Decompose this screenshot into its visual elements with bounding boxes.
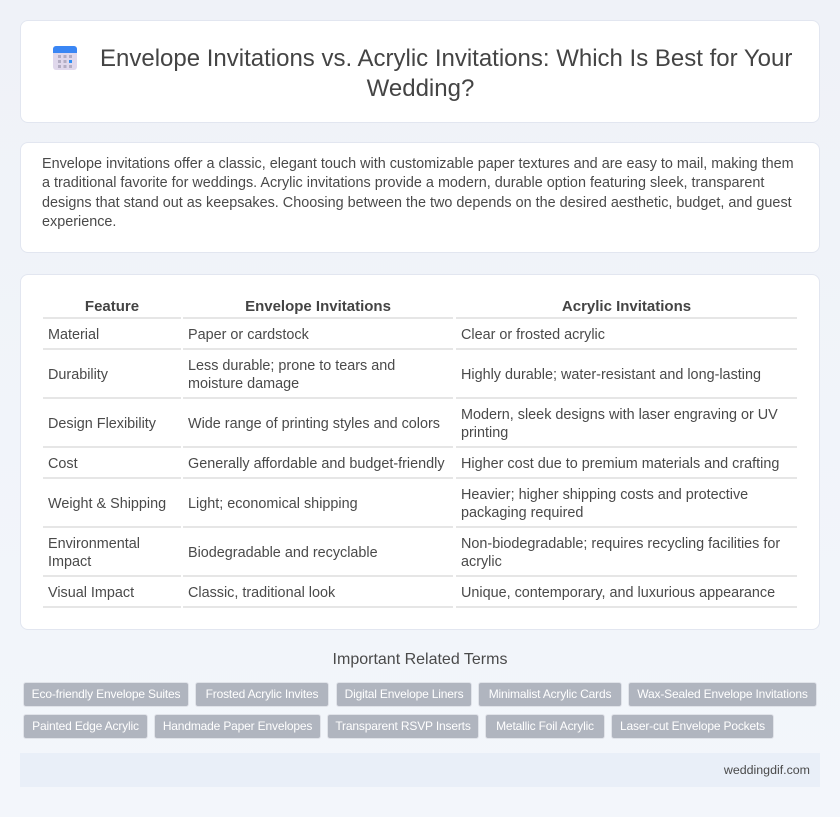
row: Visual Impact: Unique, contemporary, and luxurious appearance — [461, 585, 775, 601]
row: Visual Impact: Visual Impact — [48, 585, 134, 601]
tag — [327, 714, 479, 739]
table header: Feature: Feature — [85, 298, 139, 315]
tag: Digital Envelope Liners — [345, 687, 463, 701]
tag: Laser-cut Envelope Pockets — [620, 719, 765, 733]
row: Weight & Shipping — [48, 487, 748, 521]
row: Visual Impact: Classic, traditional look — [188, 585, 335, 601]
tag: Metallic Foil Acrylic — [496, 719, 594, 733]
description text: experience. — [42, 214, 116, 230]
footer source text: weddingdif.com — [724, 763, 810, 777]
row: Environmental Impact: Impact — [48, 554, 91, 570]
row: Environmental Impact: Non-biodegradable; requires recycling facilities for — [461, 536, 780, 552]
row: Environmental Impact: acrylic — [461, 554, 502, 570]
row: Environmental Impact: Biodegradable and recyclable — [188, 545, 378, 561]
heading: Important Related Terms: Important Related Terms — [333, 651, 507, 668]
tag: Eco-friendly Envelope Suites — [32, 687, 180, 701]
description text: a traditional favorite for weddings. Acrylic invitations provide a modern, durable option featuring sleek, transparent — [42, 175, 764, 191]
tag — [485, 714, 605, 739]
tag — [611, 714, 774, 739]
row: Environmental Impact: Environmental — [48, 536, 140, 552]
row: Environmental Impact — [48, 536, 780, 570]
row: Design Flexibility — [48, 407, 778, 441]
row: Material: Clear or frosted acrylic — [461, 327, 605, 343]
related terms tags — [23, 682, 817, 739]
tag: Wax-Sealed Envelope Invitations — [637, 687, 808, 701]
description text — [42, 156, 794, 230]
row: Weight & Shipping: Heavier; higher shipping costs and protective — [461, 487, 748, 503]
row: Cost: Cost — [48, 456, 78, 472]
tag — [154, 714, 321, 739]
footer bar — [20, 753, 820, 787]
row: Durability: moisture damage — [188, 376, 299, 392]
tag — [195, 682, 329, 707]
tag — [23, 714, 148, 739]
row: Cost — [48, 456, 779, 472]
row: Weight & Shipping: Weight & Shipping — [48, 496, 166, 512]
header panel — [20, 20, 820, 123]
row: Design Flexibility: Modern, sleek designs with laser engraving or UV — [461, 407, 778, 423]
row: Weight & Shipping: packaging required — [461, 505, 583, 521]
row: Cost: Generally affordable and budget-friendly — [188, 456, 445, 472]
tag: Handmade Paper Envelopes — [163, 719, 312, 733]
row: Durability: Less durable; prone to tears and — [188, 358, 395, 374]
table header: Envelope Invitations: Envelope Invitations — [245, 298, 391, 315]
row: Visual Impact — [48, 585, 775, 601]
row: Durability: Durability — [48, 367, 108, 383]
table header: Acrylic Invitations: Acrylic Invitations — [562, 298, 691, 315]
tag — [336, 682, 472, 707]
row: Material: Paper or cardstock — [188, 327, 309, 343]
tag: Transparent RSVP Inserts — [335, 719, 471, 733]
row: Material: Material — [48, 327, 99, 343]
row: Weight & Shipping: Light; economical shipping — [188, 496, 358, 512]
title: Envelope Invitations vs. Acrylic Invitations: Which Is Best for Your — [100, 45, 792, 72]
row: Cost: Higher cost due to premium materials and crafting — [461, 456, 779, 472]
tag: Minimalist Acrylic Cards — [489, 687, 611, 701]
row: Durability: Highly durable; water-resistant and long-lasting — [461, 367, 761, 383]
tag: Frosted Acrylic Invites — [206, 687, 318, 701]
title: Wedding? — [367, 75, 474, 102]
comparison table — [43, 298, 797, 608]
tag: Painted Edge Acrylic — [32, 719, 139, 733]
tag — [478, 682, 622, 707]
row: Material — [48, 327, 605, 343]
tag — [628, 682, 817, 707]
tag — [23, 682, 189, 707]
title — [100, 45, 792, 102]
row: Design Flexibility: Design Flexibility — [48, 416, 156, 432]
row: Durability — [48, 358, 761, 392]
row: Design Flexibility: Wide range of printing styles and colors — [188, 416, 440, 432]
row: Design Flexibility: printing — [461, 425, 508, 441]
icon: calendar — [53, 46, 77, 70]
description text: designs that stand out as keepsakes. Choosing between the two depends on the desired aesthetic, budget, and guest — [42, 195, 792, 211]
comparison table panel — [20, 274, 820, 630]
description text: Envelope invitations offer a classic, elegant touch with customizable paper textures and are easy to mail, making them — [42, 156, 794, 172]
description panel — [20, 142, 820, 253]
